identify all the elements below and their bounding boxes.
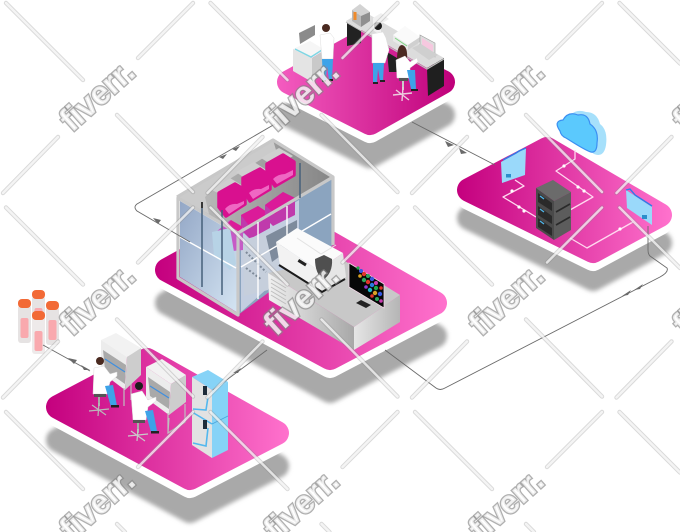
person: technician at cabinet 1 xyxy=(89,357,119,416)
icon: sample tubes xyxy=(18,290,59,354)
icon: biosafety cabinet 2 xyxy=(146,359,186,433)
icon: server rack xyxy=(536,180,571,240)
watermark text: fiverr. xyxy=(52,52,141,138)
icon: white instruments xyxy=(373,13,420,50)
arrow: analysis lab to data platform xyxy=(412,122,495,165)
icon: biosafety cabinet 1 xyxy=(101,333,141,406)
person: technician at machine xyxy=(320,24,334,82)
watermark text: fiverr. xyxy=(461,52,550,138)
arrow: core facility to data platform xyxy=(385,226,667,390)
internal apparatus xyxy=(212,220,297,296)
icon: monitor xyxy=(412,35,438,60)
watermark text: fiverr. xyxy=(256,256,345,342)
arrow: tubes to cabinet xyxy=(43,345,90,371)
panel: sample prep platform (lower) xyxy=(58,333,277,486)
icon: cloud xyxy=(557,111,606,155)
arrow: freezer to core facility xyxy=(213,350,267,390)
person: technician at cabinet 2 xyxy=(128,382,159,441)
panel: analysis lab platform (top) xyxy=(289,4,444,131)
panel shadows xyxy=(58,81,660,511)
icon: monitor with heat map xyxy=(349,263,384,308)
watermark text: fiverr. xyxy=(256,52,345,138)
rear glass xyxy=(238,177,333,315)
person: seated scientist xyxy=(393,45,418,101)
icon: gray analyser box xyxy=(352,4,370,27)
icon: folder right xyxy=(626,189,652,225)
upper floor xyxy=(177,140,333,232)
watermark text: fiverr. xyxy=(52,256,141,342)
lower tier storage boxes xyxy=(216,192,295,252)
person: standing scientist xyxy=(372,22,389,84)
icon: freezer xyxy=(192,370,228,458)
lab desk with instruments xyxy=(346,4,444,96)
glass clean room cube xyxy=(177,140,333,315)
panel: data platform (right) xyxy=(469,111,660,259)
arrow: core facility loop to analysis lab xyxy=(135,124,275,242)
icon: folder left xyxy=(501,148,526,183)
icon: mass spectrometer instrument xyxy=(276,228,346,292)
icon: shield emblem xyxy=(315,255,332,280)
arrows: connector lines xyxy=(43,122,667,390)
cube frame xyxy=(177,140,333,315)
icon: sequencer machine xyxy=(293,25,325,82)
analysis desk xyxy=(268,258,400,350)
watermark text: fiverr. xyxy=(461,256,550,342)
panel: core facility platform (middle) xyxy=(167,140,435,366)
data flow circuit lines xyxy=(503,150,633,248)
upper tier storage boxes xyxy=(212,148,294,216)
